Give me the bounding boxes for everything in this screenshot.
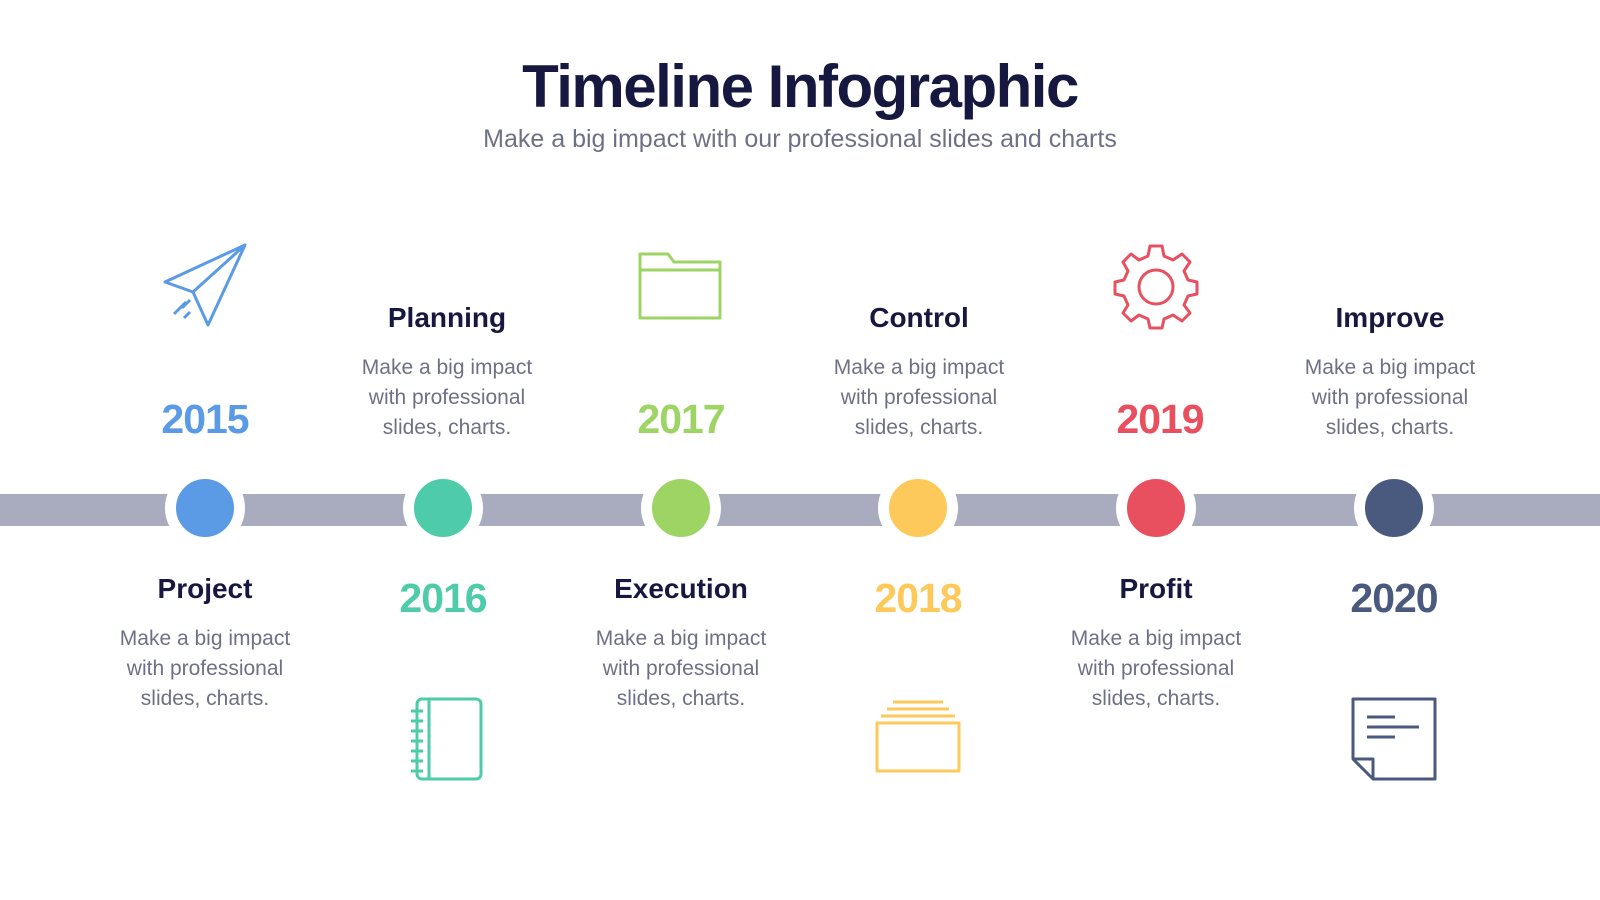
timeline bar [0,494,1600,526]
subtitle: Make a big impact with our professional slides and charts [483,125,1117,153]
icon: folder [638,252,722,320]
step: Project [120,573,290,710]
step: Execution: Execution [614,573,748,604]
step: Planning [362,302,532,439]
year 2015: 2015 [161,396,249,442]
text: Make a big impact with professional slides, charts. [1071,627,1241,710]
step: Improve: Improve [1336,302,1444,333]
step: Control: Control [869,302,969,333]
year 2017: 2017 [637,396,725,442]
title: Timeline Infographic [522,53,1078,120]
step: Execution [596,573,766,710]
year 2016: 2016 [399,575,487,621]
step: Profit [1071,573,1242,710]
text: Make a big impact with professional slides, charts. [834,356,1004,439]
step: Control [834,302,1004,439]
text: Make a big impact with professional slides, charts. [1305,356,1475,439]
step: Project: Project [158,573,252,604]
text: Profit [1119,573,1193,604]
text: Make a big impact with professional slides, charts. [120,627,290,710]
year 2018: 2018 [874,575,962,621]
text: Make a big impact with professional slides, charts. [596,627,766,710]
icon: notebook [411,698,482,780]
step: Improve [1305,302,1476,439]
year 2019: 2019 [1116,396,1204,442]
text: Planning [388,302,506,333]
icon: gear [1114,244,1198,330]
icon: document [1352,698,1436,780]
text: Make a big impact with professional slides, charts. [362,356,532,439]
year 2020: 2020 [1350,575,1438,621]
icon: paper plane [163,244,246,326]
icon: stacked cards [876,700,960,772]
